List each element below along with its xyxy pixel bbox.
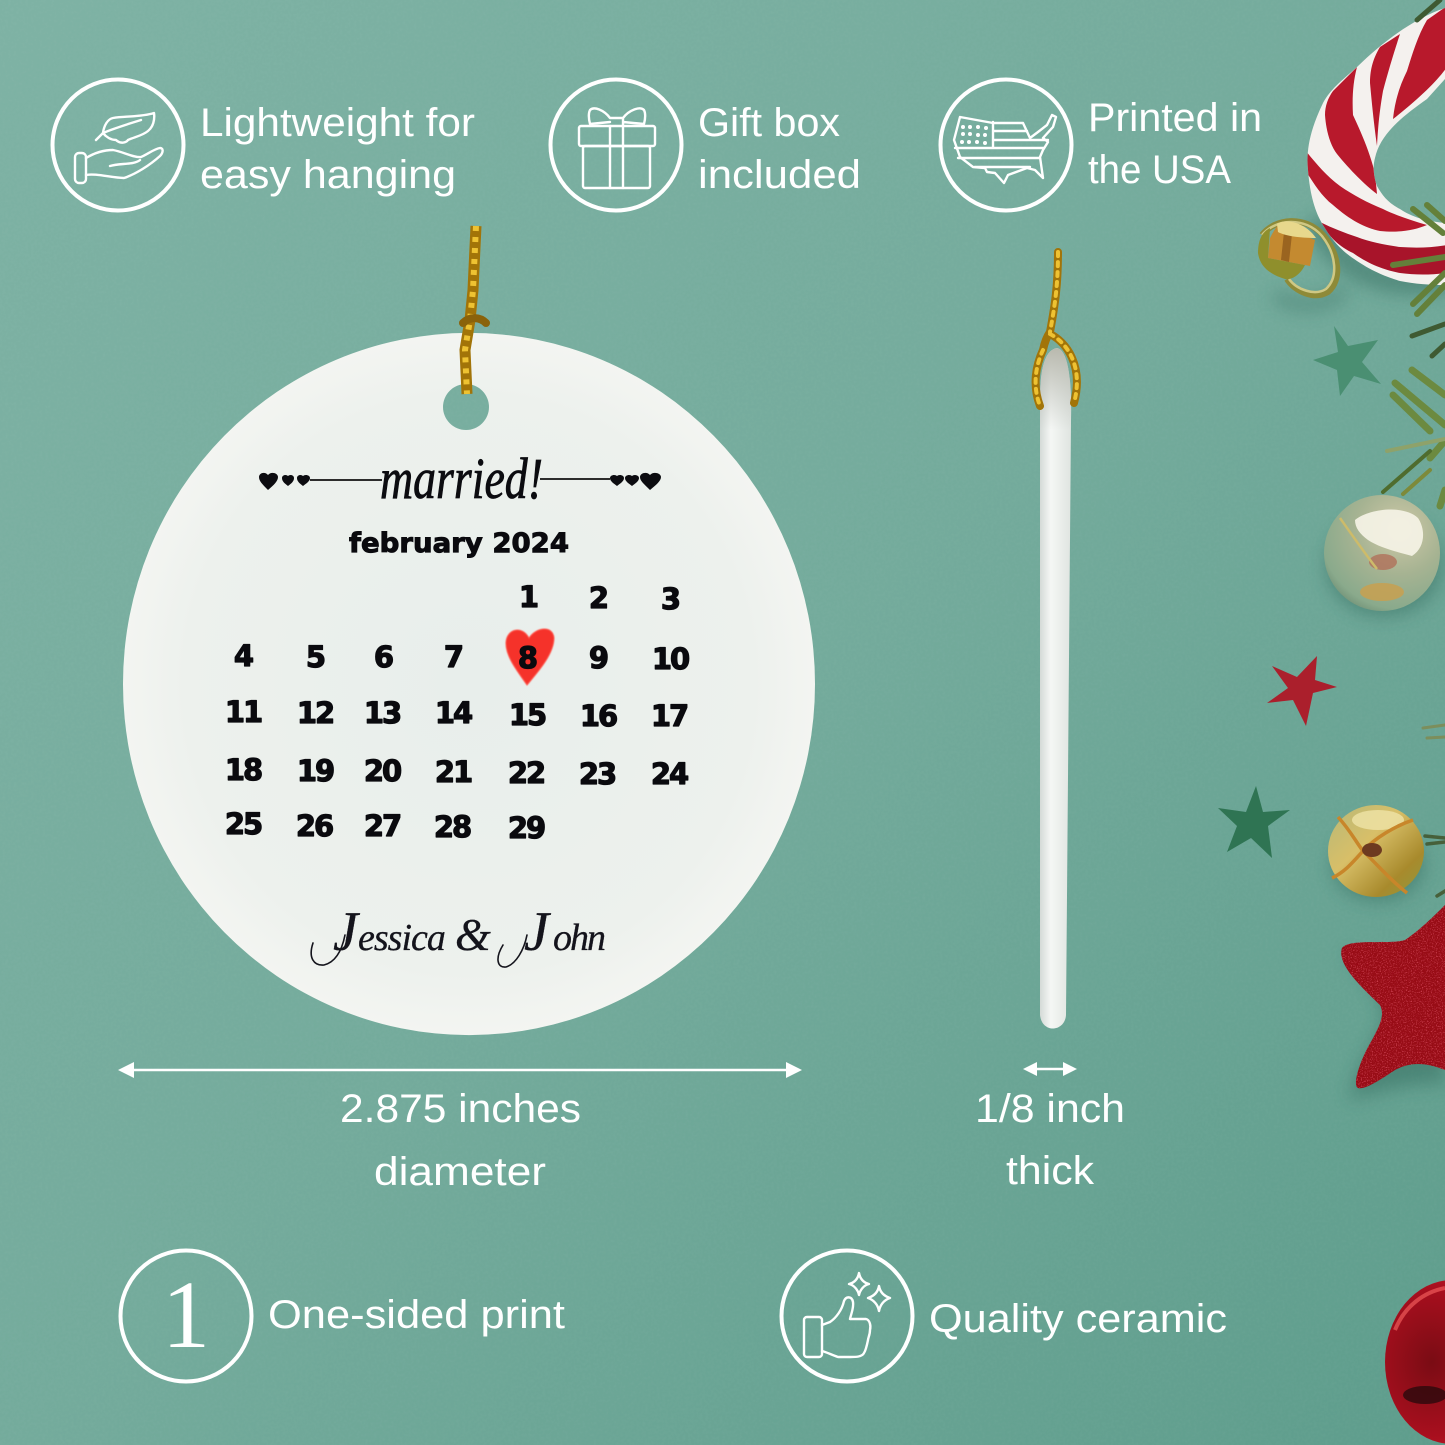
icon: USA flag map — [940, 80, 1072, 210]
red heart highlight — [506, 629, 554, 685]
calendar numbers: 12 — [297, 696, 333, 730]
red glitter star — [1340, 905, 1445, 1100]
confetti star: red — [1267, 656, 1337, 726]
names script: essica — [358, 917, 445, 959]
married banner with hearts: married! — [380, 446, 543, 511]
text: gift box included: included — [698, 153, 861, 197]
text: lightweight for easy hanging: Lightweight for — [200, 101, 475, 145]
calendar numbers: 24 — [651, 757, 688, 791]
calendar numbers: 19 — [297, 754, 334, 788]
gold ribbon curl — [1258, 221, 1345, 304]
arrow: width — [118, 1062, 802, 1078]
calendar numbers: 16 — [580, 699, 617, 733]
icon: hand holding leaf — [52, 80, 184, 210]
icon: gift box — [550, 80, 682, 210]
dimension: diameter — [118, 1062, 802, 1194]
calendar numbers: 2 — [589, 581, 607, 615]
gold string loop — [1036, 252, 1077, 406]
text: 2.875 inches diameter — [340, 1087, 581, 1194]
calendar numbers: 22 — [508, 756, 544, 790]
text: printed in the USA: Printed in — [1088, 96, 1262, 140]
text: lightweight for easy hanging — [200, 101, 475, 197]
calendar numbers: 11 — [225, 695, 262, 729]
calendar numbers: 29 — [508, 811, 545, 845]
married banner with hearts — [259, 446, 661, 511]
calendar numbers: 10 — [652, 642, 689, 676]
red bauble — [1385, 1280, 1445, 1444]
text: 2.875 inches diameter: 2.875 inches — [340, 1087, 581, 1131]
calendar numbers: 13 — [364, 696, 400, 730]
pine sprigs — [1383, 0, 1445, 896]
calendar numbers: 27 — [364, 809, 400, 843]
calendar numbers: 5 — [306, 640, 325, 674]
calendar numbers: 4 — [234, 639, 253, 673]
calendar numbers: 25 — [225, 807, 262, 841]
feature: one-sided print — [120, 1250, 565, 1382]
icon: number one: 1 — [162, 1261, 210, 1368]
text: quality ceramic: Quality ceramic — [929, 1297, 1227, 1341]
calendar numbers: 18 — [225, 753, 262, 787]
calendar numbers: 20 — [364, 754, 401, 788]
decorative photo props — [1218, 0, 1445, 1444]
calendar numbers: 17 — [651, 699, 687, 733]
feature: gift box — [550, 80, 861, 210]
gold hanging string — [463, 226, 486, 394]
calendar numbers — [225, 580, 689, 845]
names script — [311, 901, 605, 967]
calendar numbers: 14 — [435, 696, 472, 730]
calendar numbers: 8 — [518, 641, 537, 675]
text: 2.875 inches diameter: diameter — [374, 1150, 546, 1194]
calendar numbers: 26 — [296, 809, 333, 843]
dimension: thickness — [975, 1062, 1125, 1193]
names script: J — [524, 901, 552, 963]
month title: february 2024 — [349, 528, 569, 559]
calendar numbers: 15 — [509, 698, 546, 732]
text: 1/8 inch thick: 1/8 inch — [975, 1087, 1125, 1131]
calendar numbers: 28 — [434, 810, 471, 844]
silver bauble — [1324, 495, 1442, 616]
ornament front view — [123, 226, 815, 1035]
text: printed in the USA — [1088, 96, 1262, 192]
feature: printed in the USA — [940, 80, 1262, 210]
ceramic edge — [1040, 348, 1071, 1029]
calendar numbers: 1 — [519, 580, 538, 614]
icon: thumbs up with sparkles — [782, 1250, 912, 1382]
ornament disc with hole — [123, 333, 815, 1035]
text: printed in the USA: the USA — [1088, 148, 1231, 192]
icon: number one — [120, 1250, 252, 1382]
text: 1/8 inch thick: thick — [1006, 1149, 1095, 1193]
feature: quality ceramic — [782, 1250, 1227, 1382]
text: lightweight for easy hanging: easy hanging — [200, 153, 456, 197]
feature: lightweight — [52, 80, 475, 210]
text: gift box included — [698, 101, 861, 197]
calendar numbers: 23 — [579, 757, 615, 791]
confetti star: dark green — [1218, 786, 1290, 858]
calendar numbers: 7 — [444, 640, 462, 674]
names script: J — [333, 901, 361, 963]
text: gift box included: Gift box — [698, 101, 840, 145]
text: 1/8 inch thick — [975, 1087, 1125, 1193]
names script: & — [455, 909, 491, 960]
jingle bell — [1328, 805, 1424, 901]
calendar numbers: 9 — [589, 641, 608, 675]
ornament side view — [1036, 252, 1077, 1029]
candy cane — [1300, 0, 1445, 290]
text: one-sided print: One-sided print — [268, 1293, 565, 1337]
confetti star: green — [1313, 326, 1381, 396]
calendar numbers: 21 — [435, 755, 472, 789]
calendar numbers: 3 — [661, 582, 679, 616]
calendar numbers: 6 — [374, 640, 393, 674]
arrow: thickness — [1023, 1062, 1077, 1076]
names script: ohn — [553, 917, 605, 959]
